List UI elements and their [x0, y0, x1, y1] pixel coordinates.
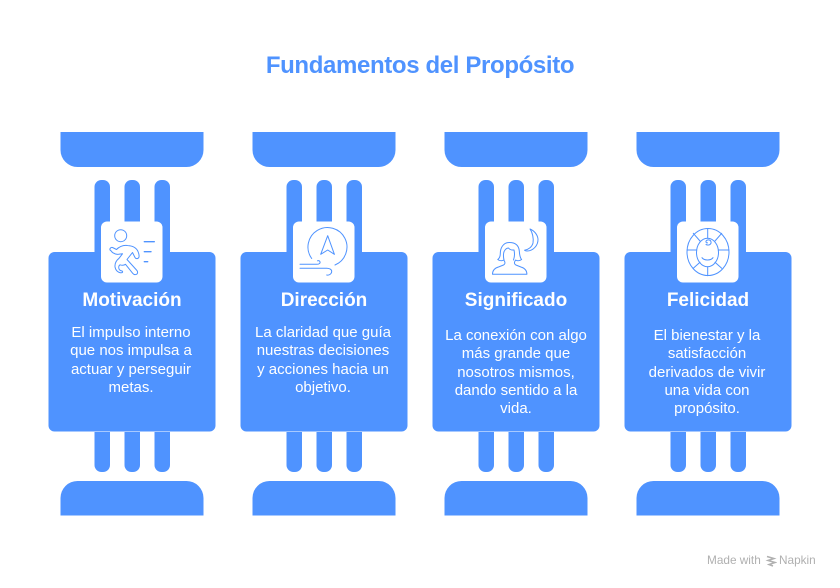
- text: Significado description: dando sentido a la: [455, 382, 577, 399]
- credit: Made with Napkin: [707, 553, 816, 567]
- heading: Motivación: Motivación: [82, 290, 182, 311]
- text: Motivación description: que nos impulsa a: [70, 342, 192, 359]
- text: Significado description: nosotros mismos,: [457, 364, 575, 381]
- heading: Felicidad: Felicidad: [667, 290, 749, 311]
- pillar: Motivación: [48, 132, 216, 516]
- text: Motivación description: metas.: [108, 379, 154, 396]
- text: Felicidad description: propósito.: [674, 400, 740, 417]
- text: Dirección description: nuestras decisiones: [257, 342, 389, 359]
- text: Significado description: La conexión con algo: [445, 327, 587, 344]
- icon: smiling face in segmented circle: [687, 228, 729, 276]
- text: Dirección description: [255, 324, 391, 396]
- text: Significado description: [445, 327, 587, 417]
- text: Felicidad description: una vida con: [664, 382, 750, 399]
- text: Felicidad description: El bienestar y la: [654, 327, 760, 344]
- title: Fundamentos del Propósito: [266, 52, 574, 79]
- credit: Made with Napkin: Napkin: [779, 553, 816, 567]
- text: Dirección description: y acciones hacia un: [257, 361, 389, 378]
- text: Motivación description: [70, 324, 192, 396]
- text: Motivación description: actuar y perseguir: [71, 361, 191, 378]
- text: Felicidad description: derivados de vivir: [649, 364, 765, 381]
- pillar: Significado: [432, 132, 600, 516]
- text: Significado description: más grande que: [462, 345, 570, 362]
- credit: Made with Napkin: Made with: [707, 553, 761, 567]
- text: Dirección description: La claridad que guía: [255, 324, 391, 341]
- text: Felicidad description: [649, 327, 766, 417]
- heading: Dirección: Dirección: [281, 290, 367, 311]
- text: Significado description: vida.: [500, 400, 532, 417]
- pillar: Dirección: [240, 132, 408, 516]
- heading: Significado: Significado: [465, 290, 567, 311]
- text: Dirección description: objetivo.: [295, 379, 351, 396]
- icon: running person: [110, 230, 154, 275]
- icon: compass arrow with wind: [300, 228, 347, 275]
- icon: person with moon: [492, 229, 538, 274]
- pillar: Felicidad: [624, 132, 792, 516]
- text: Motivación description: El impulso interno: [71, 324, 191, 341]
- text: Felicidad description: satisfacción: [668, 345, 746, 362]
